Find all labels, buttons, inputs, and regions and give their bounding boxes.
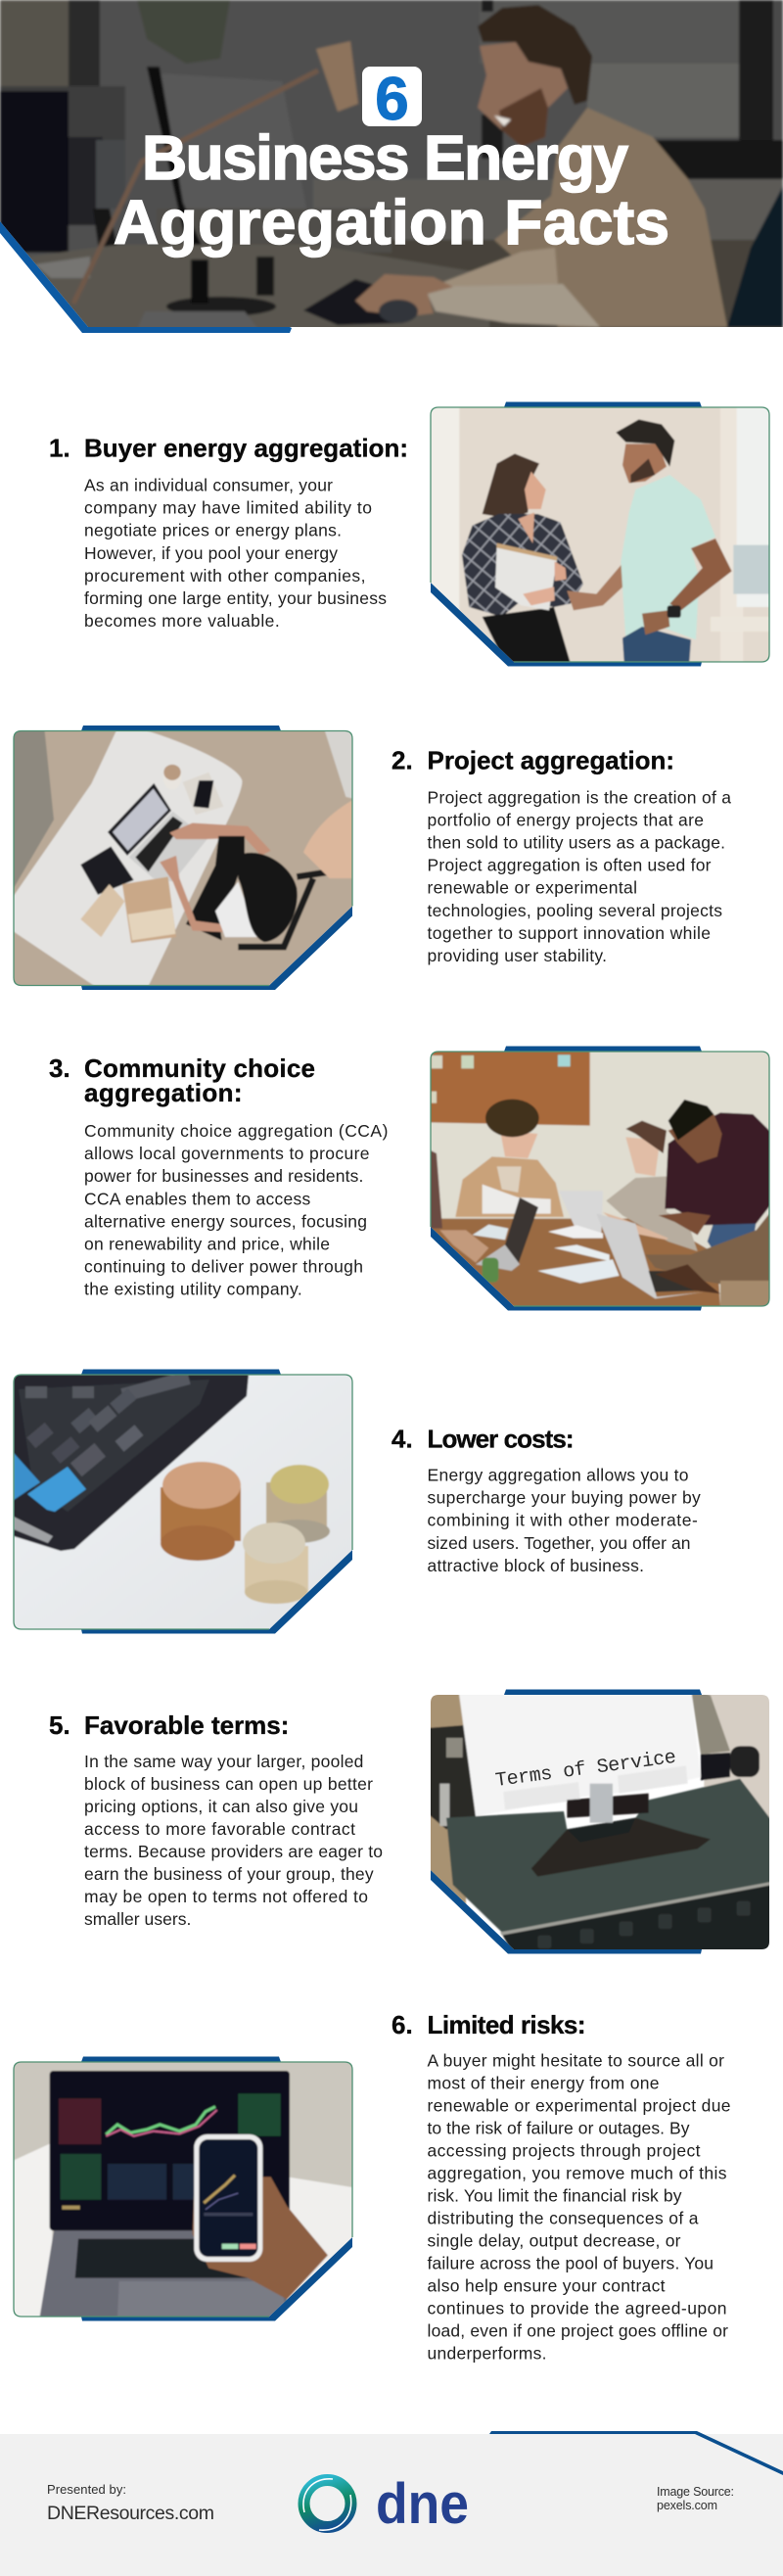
section 3 text: Community choice bbox=[84, 1054, 315, 1083]
main title bbox=[114, 122, 669, 258]
section 5 text: Favorable terms: bbox=[84, 1710, 289, 1740]
section 5 text: earn the business of your group, they bbox=[84, 1864, 374, 1884]
section 2 text: portfolio of energy projects that are bbox=[427, 810, 704, 829]
section 6 text: also help ensure your contract bbox=[427, 2276, 666, 2296]
dne logo bbox=[303, 2472, 469, 2536]
section 2 text: together to support innovation while bbox=[427, 923, 711, 943]
section 1 text: Buyer energy aggregation: bbox=[84, 433, 408, 462]
section 6 text: distributing the consequences of a bbox=[427, 2209, 699, 2228]
section 6 text: to the risk of failure or outages. By bbox=[427, 2119, 690, 2138]
presented by bbox=[47, 2482, 214, 2524]
section 5 text: smaller users. bbox=[84, 1909, 191, 1929]
section 2 text: providing user stability. bbox=[427, 946, 607, 965]
section 6 text: underperforms. bbox=[427, 2344, 546, 2364]
footer accent line bbox=[489, 2431, 783, 2475]
typewriter paper text: Terms of Service bbox=[494, 1747, 677, 1793]
section 2 text bbox=[392, 746, 731, 965]
section 5 text: may be open to terms not offered to bbox=[84, 1887, 368, 1906]
section 1 text: However, if you pool your energy bbox=[84, 543, 338, 563]
section 3 text: alternative energy sources, focusing bbox=[84, 1211, 367, 1231]
hero banner bbox=[0, 0, 783, 333]
section 6 text: load, even if one project goes offline or bbox=[427, 2321, 728, 2341]
section 6 text bbox=[392, 2010, 730, 2364]
section 3 text: the existing utility company. bbox=[84, 1280, 302, 1299]
section 5 text: pricing options, it can also give you bbox=[84, 1797, 358, 1816]
section 6 text: renewable or experimental project due bbox=[427, 2096, 730, 2116]
image source: pexels.com bbox=[657, 2499, 717, 2512]
image source: Image Source: bbox=[657, 2485, 734, 2499]
section 4 photo: calculator and coins bbox=[14, 1369, 352, 1633]
footer bbox=[0, 2431, 783, 2576]
section 5 text: 5. bbox=[49, 1710, 70, 1740]
section 5 text: In the same way your larger, pooled bbox=[84, 1752, 363, 1771]
section 3 text: 3. bbox=[49, 1054, 70, 1083]
section 4 text: Lower costs: bbox=[427, 1424, 574, 1453]
section 6 text: 6. bbox=[392, 2010, 413, 2039]
section 2 text: Project aggregation is often used for bbox=[427, 856, 712, 875]
section 6 text: risk. You limit the financial risk by bbox=[427, 2186, 682, 2206]
section 1 text: negotiate prices or energy plans. bbox=[84, 521, 342, 540]
section 1 text: forming one large entity, your business bbox=[84, 588, 387, 608]
section 6 text: continues to provide the agreed-upon bbox=[427, 2299, 726, 2318]
badge with number 6: 6 bbox=[375, 66, 409, 133]
section 6 photo: phone and laptop stock chart bbox=[10, 2056, 362, 2327]
section 1 text: 1. bbox=[49, 433, 70, 462]
section 2 text: renewable or experimental bbox=[427, 878, 637, 898]
section 2 text: technologies, pooling several projects bbox=[427, 901, 722, 920]
section 5 text: access to more favorable contract bbox=[84, 1819, 355, 1839]
section 1 text: As an individual consumer, your bbox=[84, 476, 333, 495]
section 4 text: combining it with other moderate- bbox=[427, 1511, 698, 1530]
section 6 text: A buyer might hesitate to source all or bbox=[427, 2051, 724, 2071]
section 6 text: single delay, output decrease, or bbox=[427, 2231, 681, 2251]
section 6 text: Limited risks: bbox=[427, 2010, 585, 2039]
section 4 text: Energy aggregation allows you to bbox=[427, 1465, 689, 1484]
section 3 text: on renewability and price, while bbox=[84, 1234, 330, 1253]
section 3 text: CCA enables them to access bbox=[84, 1189, 311, 1208]
section 5 text bbox=[49, 1710, 383, 1929]
section 5 text: terms. Because providers are eager to bbox=[84, 1842, 383, 1861]
section 2 photo: woman at laptop from above bbox=[10, 726, 362, 996]
section 2 text: Project aggregation: bbox=[427, 746, 674, 775]
presented by: Presented by: bbox=[47, 2482, 126, 2497]
section 4 text: 4. bbox=[392, 1424, 413, 1453]
section 1 text bbox=[49, 433, 408, 631]
section 4 text: sized users. Together, you offer an bbox=[427, 1533, 691, 1553]
presented by: DNEResources.com bbox=[47, 2503, 214, 2524]
section 2 text: then sold to utility users as a package. bbox=[427, 832, 725, 852]
section 2 text: 2. bbox=[392, 746, 413, 775]
section 3 text: power for businesses and residents. bbox=[84, 1166, 363, 1186]
section 3 text: Community choice aggregation (CCA) bbox=[84, 1121, 388, 1141]
section 6 text: aggregation, you remove much of this bbox=[427, 2164, 727, 2183]
section 3 text: aggregation: bbox=[84, 1078, 243, 1107]
hero photo: man working at desk bbox=[0, 0, 783, 333]
main title: Aggregation Facts bbox=[114, 187, 669, 258]
section 6 text: failure across the pool of buyers. You bbox=[427, 2254, 714, 2273]
section 1 text: procurement with other companies, bbox=[84, 566, 366, 585]
section 4 text: supercharge your buying power by bbox=[427, 1488, 701, 1508]
section 3 photo: team meeting around table bbox=[427, 1046, 779, 1317]
dne logo: dne bbox=[376, 2472, 469, 2536]
section 5 photo: typewriter with Terms of Service bbox=[427, 1689, 779, 1960]
section 3 text: continuing to deliver power through bbox=[84, 1257, 363, 1277]
section 6 text: most of their energy from one bbox=[427, 2074, 660, 2093]
section 1 text: becomes more valuable. bbox=[84, 611, 280, 631]
hero corner band bbox=[0, 221, 292, 333]
section 4 text: attractive block of business. bbox=[427, 1556, 644, 1575]
section 1 text: company may have limited ability to bbox=[84, 498, 372, 518]
section 4 text bbox=[392, 1424, 701, 1575]
section 6 text: accessing projects through project bbox=[427, 2141, 701, 2161]
section 1 photo: two colleagues talking bbox=[427, 401, 779, 673]
badge with number 6 bbox=[362, 66, 422, 133]
section 5 text: block of business can open up better bbox=[84, 1774, 373, 1794]
main title: Business Energy bbox=[142, 122, 628, 193]
section 2 text: Project aggregation is the creation of a bbox=[427, 787, 731, 807]
image source bbox=[657, 2485, 734, 2512]
section 3 text: allows local governments to procure bbox=[84, 1144, 370, 1163]
section 3 text bbox=[49, 1054, 388, 1299]
